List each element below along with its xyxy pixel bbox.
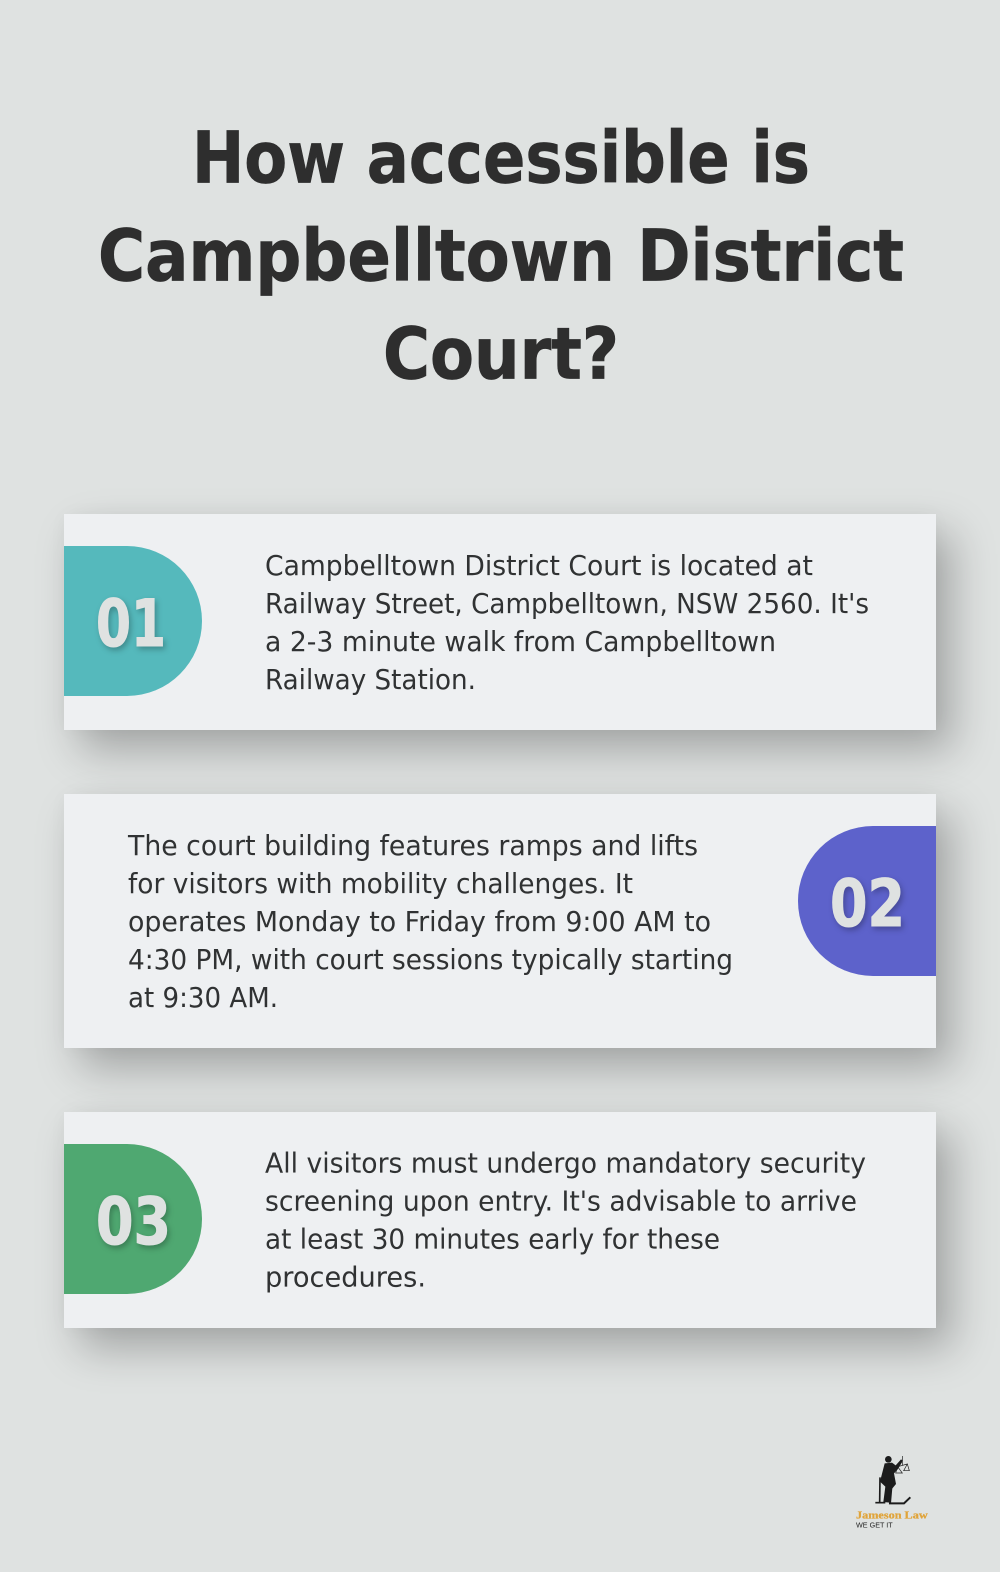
text block: facilities and hours: 4:30 PM, with court sessions typically starting bbox=[128, 944, 733, 976]
text block: location: Railway Street, Campbelltown, NSW 2560. It's bbox=[265, 588, 869, 620]
text block: location: Campbelltown District Court is located at bbox=[265, 550, 813, 582]
panel: card 01 location bbox=[64, 514, 936, 730]
badge: 02 indigo bbox=[798, 826, 936, 976]
number 01: 01 bbox=[96, 587, 166, 662]
title: How accessible is bbox=[192, 116, 810, 200]
panel: card 02 facilities and hours bbox=[64, 794, 936, 1048]
text block: location: a 2-3 minute walk from Campbelltown bbox=[265, 626, 776, 658]
title: Campbelltown District bbox=[98, 214, 904, 298]
badge: 03 green bbox=[64, 1144, 202, 1294]
text block: facilities and hours: The court building features ramps and lifts bbox=[127, 830, 698, 862]
text block: location bbox=[265, 550, 869, 696]
title: Court? bbox=[383, 312, 619, 396]
text block: location: Railway Station. bbox=[265, 664, 476, 696]
text block: security: procedures. bbox=[265, 1262, 426, 1294]
text block: security: All visitors must undergo mandatory security bbox=[265, 1148, 866, 1180]
text block: facilities and hours bbox=[127, 830, 733, 1014]
number 03: 03 bbox=[96, 1185, 171, 1260]
tagline: WE GET IT bbox=[856, 1522, 893, 1529]
brand name: Jameson Law bbox=[856, 1510, 929, 1521]
text block: security bbox=[265, 1148, 866, 1294]
text block: facilities and hours: for visitors with mobility challenges. It bbox=[128, 868, 633, 900]
text block: security: screening upon entry. It's advisable to arrive bbox=[265, 1186, 857, 1218]
text block: facilities and hours: at 9:30 AM. bbox=[128, 982, 278, 1014]
title bbox=[98, 116, 904, 396]
panel: card 03 security bbox=[64, 1112, 936, 1328]
text block: security: at least 30 minutes early for these bbox=[265, 1224, 720, 1256]
badge: 01 teal bbox=[64, 546, 202, 696]
text block: facilities and hours: operates Monday to Friday from 9:00 AM to bbox=[128, 906, 711, 938]
number 02: 02 bbox=[830, 867, 905, 942]
icon: lady justice bbox=[875, 1456, 910, 1503]
logo: Jameson Law bbox=[856, 1456, 929, 1529]
